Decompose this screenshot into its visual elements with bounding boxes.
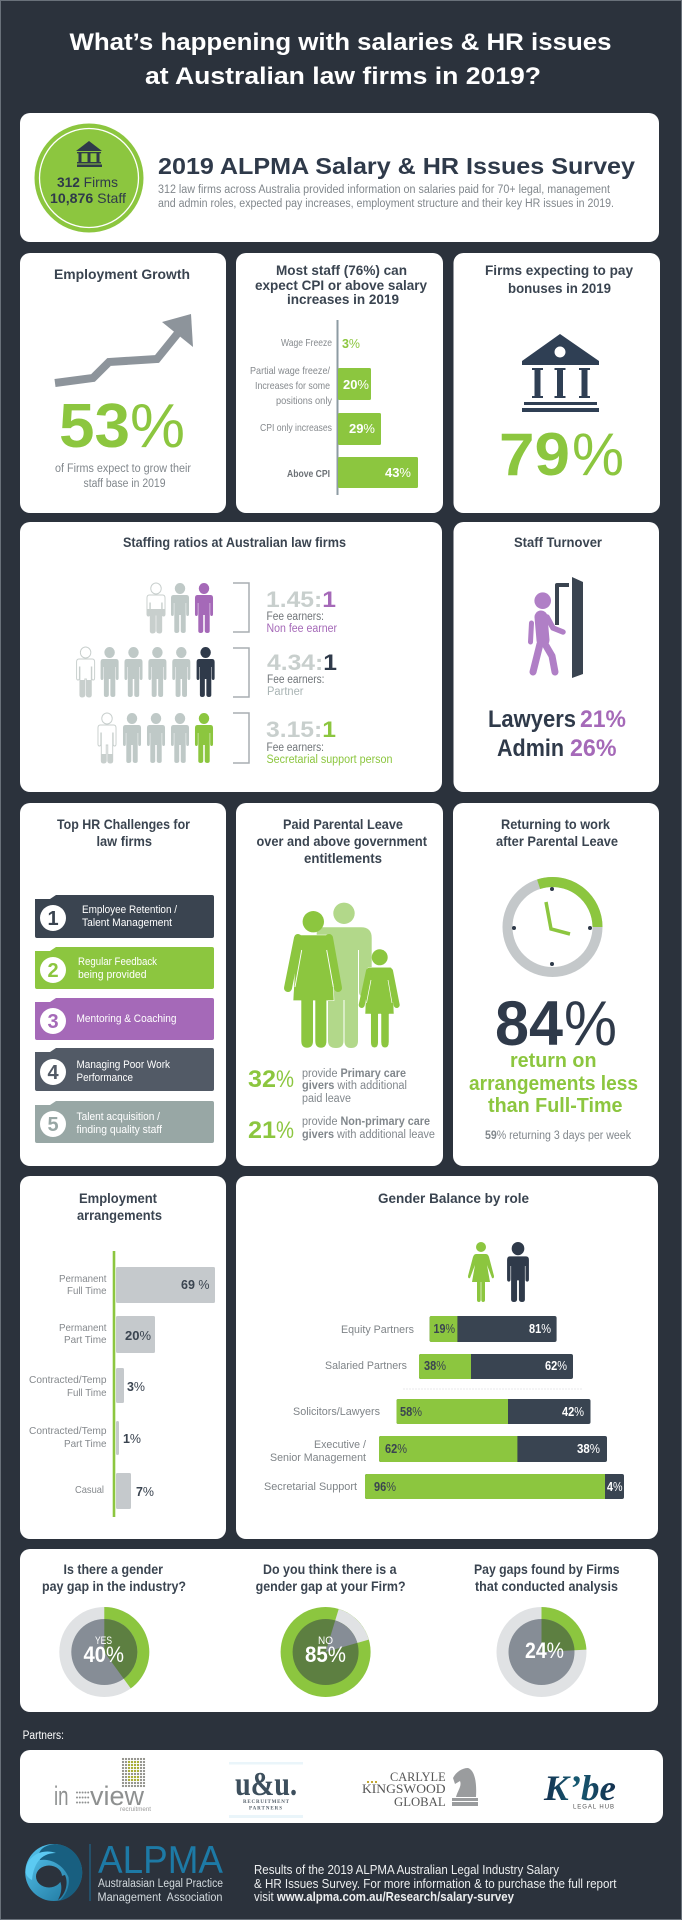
heading: Paid Parental Leave <box>283 816 403 832</box>
stacked bars: gender by role: Solicitors/Lawyers <box>293 1406 380 1418</box>
stacked bars: gender by role: Secretarial Support <box>264 1481 357 1493</box>
heading <box>496 816 618 849</box>
heading: industry gap: Is there a gender <box>64 1561 163 1577</box>
heading: after Parental Leave <box>496 833 618 849</box>
panel: staff turnover <box>454 522 659 792</box>
badge: firms and staff: 10,876 Staff <box>50 190 126 206</box>
icon: small bank <box>76 141 102 167</box>
heading: Gender Balance by role <box>378 1190 529 1206</box>
heading: analysis: that conducted analysis <box>475 1578 618 1594</box>
bar chart: salary increases: 43% <box>385 466 411 480</box>
card: challenge 1: Employee Retention / <box>82 904 178 916</box>
logo: ALPMA <box>25 1839 223 1904</box>
heading: arrangements <box>77 1207 162 1223</box>
stats: turnover: 21% <box>580 706 626 733</box>
bar chart: employment arrangements: Contracted/Temp <box>29 1425 107 1437</box>
stat: primary care givers: provide Primary care <box>302 1068 406 1080</box>
heading: industry gap: pay gap in the industry? <box>42 1578 186 1594</box>
bar chart: employment arrangements: 1% <box>123 1431 141 1446</box>
bar chart: salary increases: Above CPI <box>287 468 330 480</box>
heading: analysis <box>474 1561 620 1594</box>
stats: turnover: 26% <box>570 735 616 762</box>
heading: Employment Growth <box>54 266 190 282</box>
donut: 24% <box>496 1607 586 1697</box>
badge: firms and staff <box>34 124 144 232</box>
heading: law firms <box>96 833 152 849</box>
stat: non-primary care givers <box>248 1116 435 1144</box>
callout: return on part-time: return on <box>510 1050 596 1072</box>
card: challenge 4: Performance <box>76 1072 133 1084</box>
stat: non-primary care givers: provide Non-primary care <box>302 1116 430 1128</box>
stat: primary care givers: 32 <box>248 1066 276 1093</box>
stats: turnover <box>488 706 626 762</box>
logo: u&u: PARTNERS <box>249 1806 282 1812</box>
mother <box>288 911 338 1048</box>
stat: non-primary care givers: % <box>276 1117 294 1144</box>
heading: survey: 2019 ALPMA Salary & HR Issues Survey <box>158 153 635 179</box>
survey description: and admin roles, expected pay increases, employment structure and their key HR issues in 2019. <box>158 198 614 210</box>
card: challenge 4 <box>35 1048 214 1091</box>
card: challenge 2: being provided <box>78 969 146 981</box>
ratio row: partner: Fee earners: <box>267 674 324 686</box>
panel: top HR challenges <box>20 803 226 1166</box>
badge: firms and staff: 312 Firms <box>57 174 118 190</box>
panel: gender pay gap <box>20 1549 658 1712</box>
icon: man <box>507 1242 529 1302</box>
icon: family <box>288 903 397 1048</box>
bar chart: employment arrangements: 69 % <box>181 1277 210 1292</box>
logo: Carlyle Kingswood Global <box>362 1768 478 1809</box>
ratio row: secretarial: Secretarial support person <box>266 754 392 766</box>
heading <box>255 262 427 307</box>
bar chart: salary increases: Increases for some <box>255 380 330 392</box>
stacked bars: gender by role: 58% <box>400 1405 422 1419</box>
title: What’s happening with salaries & HR issues <box>70 29 612 56</box>
child <box>362 949 397 1048</box>
caption: staff base in 2019 <box>84 478 166 490</box>
panel: returning to work <box>453 803 659 1166</box>
logo: inview: in <box>54 1781 68 1811</box>
stacked bars: gender by role: Executive / <box>314 1439 367 1451</box>
bar chart: salary increases: positions only <box>276 395 333 407</box>
card: challenge 3: Mentoring & Coaching <box>76 1013 176 1025</box>
icon: person leaving through door <box>530 577 583 678</box>
stacked bars: gender by role: 62% <box>545 1359 567 1373</box>
heading: increases in 2019 <box>287 291 399 307</box>
stacked bars: gender by role: 19% <box>434 1322 455 1336</box>
stacked bars: gender by role: Senior Management <box>270 1452 366 1464</box>
icon: clock <box>508 882 598 972</box>
logo: KBE legal hub: LEGAL HUB <box>573 1804 614 1810</box>
logo: Carlyle Kingswood Global: KINGSWOOD <box>362 1781 446 1796</box>
logo: u&u <box>229 1762 303 1818</box>
bar chart: employment arrangements <box>29 1251 215 1517</box>
title <box>70 29 612 90</box>
donut: 85% no: 85% <box>305 1642 346 1667</box>
stat: 79% <box>499 421 624 488</box>
stacked bars: gender by role: Salaried Partners <box>325 1360 407 1372</box>
ratio row: secretarial <box>98 713 392 766</box>
caption: 59% returning 3 days per week <box>485 1130 631 1142</box>
panel: staffing ratios <box>20 522 442 792</box>
heading: Employment <box>79 1190 157 1206</box>
logo: ALPMA: ALPMA <box>98 1839 223 1882</box>
heading <box>57 816 190 849</box>
heading: industry gap <box>42 1561 186 1594</box>
donut: 85% no <box>281 1607 371 1697</box>
donut: 40% yes <box>59 1607 149 1697</box>
panel: employment growth <box>20 253 226 513</box>
card: challenge 4: 4 <box>47 1062 59 1084</box>
logo: Carlyle Kingswood Global: GLOBAL <box>394 1794 446 1809</box>
heading: expect CPI or above salary <box>255 277 427 293</box>
card: challenge 2: Regular Feedback <box>78 956 157 968</box>
heading: entitlements <box>304 850 382 866</box>
heading: Staff Turnover <box>514 534 603 550</box>
icon: rising arrow <box>55 314 193 383</box>
stat: 84%: 84 <box>495 989 563 1059</box>
logo: ALPMA: Australasian Legal Practice <box>98 1878 223 1890</box>
ratio row: partner: 4.34: 1 <box>267 650 337 675</box>
stat: primary care givers: % <box>276 1066 294 1093</box>
panel: partner logos <box>20 1750 663 1823</box>
bar chart: employment arrangements: Permanent <box>59 1322 107 1334</box>
bar chart: employment arrangements: Full Time <box>67 1285 107 1297</box>
donut: 40% yes: 40% <box>84 1642 124 1667</box>
stat: 84%: % <box>564 989 617 1059</box>
card: challenge 4: Managing Poor Work <box>76 1059 170 1071</box>
heading <box>485 262 633 296</box>
ratio row: secretarial: 3.15: 1 <box>266 717 336 742</box>
bar chart: salary increases: 29% <box>349 422 375 436</box>
heading: firm gap <box>256 1561 406 1594</box>
card: challenge 1: 1 <box>47 908 59 930</box>
card: challenge 1 <box>35 895 214 938</box>
panel: gender balance <box>236 1176 658 1539</box>
stacked bars: gender by role <box>264 1316 624 1499</box>
bar chart: salary increases: Wage Freeze <box>281 337 332 349</box>
stat: primary care givers <box>248 1066 407 1105</box>
heading: bonuses in 2019 <box>508 280 611 296</box>
bar chart: salary increases <box>250 320 418 495</box>
icon: ALPMA swoosh <box>25 1844 82 1901</box>
card: challenge 3 <box>35 998 214 1040</box>
bar chart: employment arrangements: 7% <box>136 1484 154 1499</box>
stats: turnover: Admin <box>497 735 564 762</box>
caption <box>55 463 191 490</box>
card: challenge 3: 3 <box>47 1011 59 1033</box>
panel: paid parental leave <box>236 803 443 1166</box>
stacked bars: gender by role: 38% <box>424 1359 446 1373</box>
stacked bars: gender by role: 42% <box>562 1405 584 1419</box>
partners label: Partners: <box>23 1730 64 1742</box>
ratio row: non fee earner: Fee earners: <box>266 611 324 623</box>
logo: KBE legal hub: K’be <box>543 1768 616 1808</box>
footer text <box>254 1863 617 1904</box>
footer text: & HR Issues Survey. For more information & to purchase the full report <box>254 1877 617 1891</box>
callout: return on part-time: than Full-Time <box>488 1095 622 1117</box>
heading: Staffing ratios at Australian law firms <box>123 534 346 550</box>
stacked bars: gender by role: 4% <box>607 1480 622 1494</box>
bar chart: employment arrangements: Casual <box>75 1484 104 1496</box>
bar chart: salary increases: 20% <box>343 378 369 392</box>
heading: Firms expecting to pay <box>485 262 633 278</box>
bar chart: employment arrangements: 20% <box>125 1328 151 1343</box>
bar chart: employment arrangements: Part Time <box>64 1438 107 1450</box>
stacked bars: gender by role: 96% <box>374 1480 396 1494</box>
stacked bars: gender by role: Equity Partners <box>341 1324 414 1336</box>
donut: 24%: 24% <box>525 1638 564 1663</box>
bar chart: salary increases: CPI only increases <box>260 422 332 434</box>
card: challenge 2: 2 <box>47 960 59 982</box>
stat: non-primary care givers: givers with additional leave <box>302 1129 435 1141</box>
stat: 53%: 53 <box>59 392 130 461</box>
stat: 53%: % <box>130 392 185 461</box>
ratio row: non fee earner <box>147 583 337 635</box>
logo: Carlyle Kingswood Global: CARLYLE <box>390 1769 446 1784</box>
panel: bonuses <box>454 253 660 513</box>
donut: 40% yes: YES <box>95 1635 112 1647</box>
heading: firm gap: gender gap at your Firm? <box>256 1578 406 1594</box>
bar chart: employment arrangements: Part Time <box>64 1334 107 1346</box>
logo: inview <box>54 1759 151 1813</box>
heading: Most staff (76%) can <box>276 262 407 278</box>
logo: inview: recruitment <box>120 1807 151 1813</box>
card: challenge 2 <box>35 947 214 989</box>
logo: u&u: u&u. <box>235 1766 297 1803</box>
stat: primary care givers: paid leave <box>302 1093 351 1105</box>
icon: woman <box>468 1242 494 1302</box>
bar chart: employment arrangements: 3% <box>127 1379 145 1394</box>
callout: return on part-time: arrangements less <box>469 1073 638 1095</box>
stat: 79%: % <box>572 421 624 488</box>
callout: return on part-time <box>469 1050 638 1117</box>
card: challenge 5: finding quality staff <box>76 1124 163 1136</box>
logo: inview: view <box>90 1781 144 1811</box>
stacked bars: gender by role: 62% <box>385 1442 407 1456</box>
ratio row: non fee earner: 1.45: 1 <box>266 587 336 612</box>
heading: over and above government <box>256 833 427 849</box>
panel: salary increases <box>236 253 443 513</box>
caption: of Firms expect to grow their <box>55 463 191 475</box>
footer text: Results of the 2019 ALPMA Australian Legal Industry Salary <box>254 1863 560 1877</box>
panel: survey intro <box>20 113 659 242</box>
stacked bars: gender by role: 81% <box>529 1322 551 1336</box>
stat: primary care givers: givers with additional <box>302 1080 407 1092</box>
stat: 53% <box>59 392 185 461</box>
ratio row: partner: Partner <box>267 686 304 698</box>
stat: non-primary care givers: 21 <box>248 1117 276 1144</box>
survey description: 312 law firms across Australia provided information on salaries paid for 70+ legal, management <box>158 184 611 196</box>
ratio row: partner <box>77 647 337 698</box>
stats: turnover: Lawyers <box>488 706 576 733</box>
heading <box>256 816 427 866</box>
ratio row: secretarial: Fee earners: <box>266 742 324 754</box>
heading <box>77 1190 162 1223</box>
card: challenge 5: 5 <box>47 1114 59 1136</box>
card: challenge 1: Talent Management <box>82 917 172 929</box>
card: challenge 5: Talent acquisition / <box>76 1111 161 1123</box>
father <box>317 903 372 1048</box>
bar chart: employment arrangements: Contracted/Temp <box>29 1374 107 1386</box>
heading: analysis: Pay gaps found by Firms <box>474 1561 620 1577</box>
card: challenge 5 <box>35 1101 214 1143</box>
stat: 79%: 79 <box>499 421 570 488</box>
icon: bank <box>522 334 599 412</box>
logo: u&u: RECRUITMENT <box>243 1800 290 1805</box>
logo: ALPMA: Management Association <box>98 1892 222 1904</box>
bar chart: salary increases: Partial wage freeze/ <box>250 365 330 377</box>
heading: Top HR Challenges for <box>57 816 190 832</box>
survey description <box>158 184 614 210</box>
bar chart: employment arrangements: Full Time <box>67 1387 107 1399</box>
title: at Australian law firms in 2019? <box>145 63 541 90</box>
bar chart: salary increases: 3% <box>342 337 360 351</box>
heading: Returning to work <box>501 816 610 832</box>
bar chart: employment arrangements: Permanent <box>59 1273 107 1285</box>
footer text: visit www.alpma.com.au/Research/salary-survey <box>254 1890 514 1904</box>
donut: 85% no: NO <box>318 1635 333 1647</box>
panel: employment arrangements <box>20 1176 226 1539</box>
stat: 84% <box>495 989 617 1059</box>
ratio row: non fee earner: Non fee earner <box>266 623 337 635</box>
stacked bars: gender by role: 38% <box>577 1442 600 1456</box>
heading: firm gap: Do you think there is a <box>263 1561 397 1577</box>
